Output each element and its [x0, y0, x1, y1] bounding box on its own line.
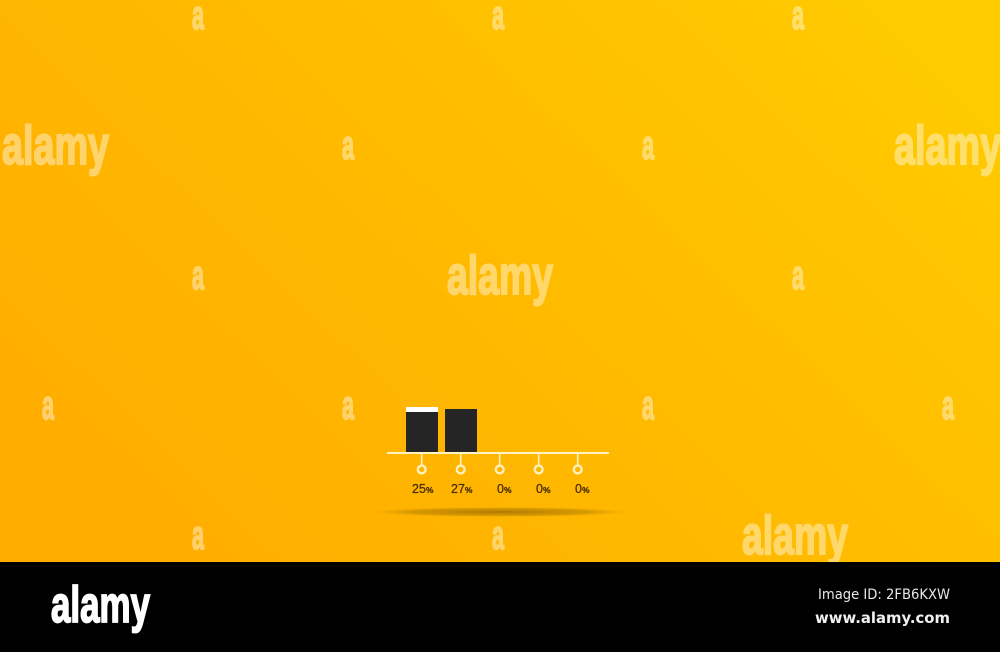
- axis line: [387, 452, 609, 454]
- value labels: 27%: [451, 482, 473, 496]
- watermark pattern: a: [342, 382, 355, 428]
- axis markers: [418, 454, 582, 473]
- watermark pattern: a: [942, 382, 955, 428]
- watermark pattern: a: [642, 122, 655, 168]
- website: www.alamy.com: [815, 609, 950, 627]
- value labels: [412, 482, 590, 496]
- image id: Image ID: 2FB6KXW: [818, 587, 950, 603]
- footer bar: [0, 562, 1000, 652]
- watermark pattern: alamy: [2, 114, 109, 176]
- watermark pattern: a: [192, 252, 205, 298]
- value labels: 0%: [575, 482, 590, 496]
- bar 1: 25%: [406, 407, 438, 452]
- watermark pattern: a: [42, 382, 55, 428]
- watermark pattern: alamy: [447, 244, 553, 306]
- watermark pattern: alamy: [742, 504, 848, 566]
- watermark pattern: a: [792, 252, 805, 298]
- watermark pattern: a: [192, 512, 205, 558]
- value labels: 0%: [497, 482, 512, 496]
- watermark pattern: a: [642, 382, 655, 428]
- watermark pattern: a: [492, 512, 505, 558]
- bar 2: 27%: [445, 409, 477, 452]
- value labels: 25%: [412, 482, 434, 496]
- ground shadow: [374, 507, 626, 517]
- footer logo: alamy: [51, 576, 150, 633]
- bar chart: [387, 407, 609, 496]
- watermark pattern: a: [342, 122, 355, 168]
- value labels: 0%: [536, 482, 551, 496]
